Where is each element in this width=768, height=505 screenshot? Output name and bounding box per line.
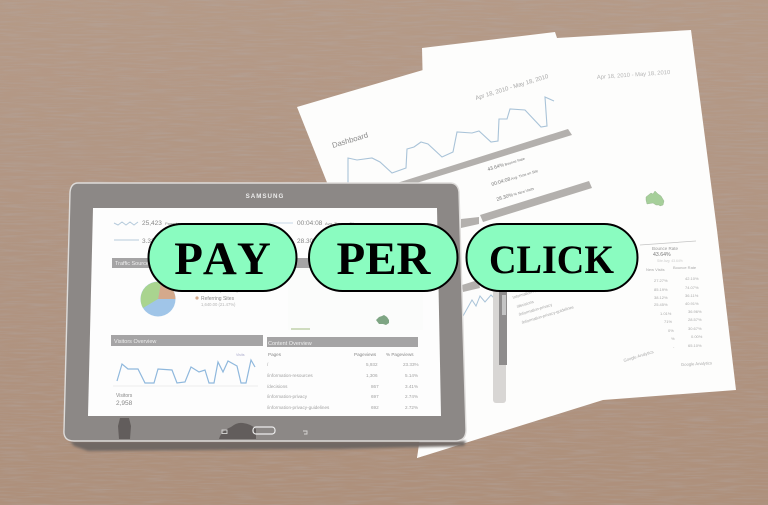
home button [253, 427, 275, 434]
pie chart [140, 282, 176, 316]
heading: Dashboard: Dashboard [331, 130, 369, 150]
panel: content overview: 5,932 [366, 362, 378, 367]
panel: visitors overview: Visitors [116, 393, 133, 399]
line chart [348, 97, 554, 183]
stats: 43.64% Bounce Rate [487, 156, 526, 173]
panel: content overview: /information-privacy-guidelines [267, 405, 330, 410]
button: CLICK: CLICK [489, 237, 614, 282]
back sheet: Site Avg: 43.64% [657, 259, 683, 263]
side table of percentages: 25.45% [654, 302, 668, 307]
button: PAY: PAY [174, 233, 271, 285]
side table of percentages: 28.57% [688, 317, 702, 322]
icon: Australia map [376, 315, 389, 325]
panel: visitors overview: Visits [236, 353, 245, 357]
side table of percentages: 65.10% [688, 343, 702, 348]
screen [88, 208, 441, 416]
stat row: 28.30% [297, 238, 319, 245]
side table of percentages: 27.27% [654, 278, 668, 283]
side table of percentages: 30.67% [688, 326, 702, 331]
back sheet [417, 30, 736, 458]
side table of percentages: 40.91% [685, 301, 699, 306]
side table of percentages: 1.01% [660, 311, 672, 316]
list lines: /information-privacy-guidelines [521, 304, 574, 325]
button: PAY [148, 224, 296, 291]
brand label: SAMSUNG [246, 193, 284, 200]
scene: papers, pen and tablet [64, 30, 736, 458]
back sheet: Apr 18, 2010 - May 18, 2010 [597, 70, 670, 81]
panel: content overview [267, 337, 419, 410]
button: PER [309, 224, 458, 291]
stat row [114, 220, 357, 245]
panel: traffic sources: 2,914.00 (38.34%) [201, 288, 239, 293]
panel: content overview: 2.72% [405, 405, 418, 410]
tablet body [64, 183, 466, 441]
list lines: Information-resources [512, 284, 550, 300]
panel: content overview: 3.41% [405, 384, 418, 389]
side table of percentages: New Visits [646, 267, 665, 272]
button: CLICK [466, 224, 638, 291]
stats: 28.30% % New Visits [496, 186, 535, 203]
back sheet: Google Analytics [681, 360, 712, 367]
list lines [512, 284, 574, 325]
panel: content overview: Pages [268, 352, 282, 357]
panel: content overview: /information-privacy [267, 394, 308, 399]
panel: content overview: Content Overview [268, 341, 312, 347]
button: PER: PER [336, 233, 432, 285]
stat row: 00:04:08 [297, 220, 323, 227]
tablet shadow [70, 441, 466, 451]
tablet [64, 183, 466, 451]
side table of percentages [646, 265, 703, 349]
panel: content overview: Pageviews [354, 352, 377, 357]
list lines: /decisions [516, 299, 534, 309]
back sheet: Google Analytics [623, 349, 654, 363]
side table of percentages: 71% [664, 319, 672, 324]
panel: content overview: / [267, 362, 269, 367]
panel: content overview: 2.74% [405, 394, 418, 399]
papers: analytics printouts [297, 30, 736, 458]
panel: visitors overview: 2,958 [116, 400, 133, 407]
list lines: /information-privacy [518, 302, 553, 317]
side table of percentages: % [671, 336, 675, 341]
side table of percentages: 38.12% [654, 295, 668, 300]
panel: visitors overview [111, 335, 263, 407]
line chart lower [463, 295, 498, 316]
pen [493, 290, 507, 403]
stat row: 3.32 [142, 238, 155, 245]
panel: visitors overview: Visitors Overview [114, 339, 156, 345]
panel: content overview: % Pageviews [386, 352, 414, 357]
hand reflection [118, 418, 256, 439]
side table of percentages: 42.10% [685, 276, 699, 281]
side table of percentages: 85.19% [654, 287, 668, 292]
side table of percentages: Bounce Rate [673, 265, 697, 270]
side table of percentages: 36.96% [688, 309, 702, 314]
panel: content overview: 692 [371, 405, 379, 410]
front sheet: Apr 18, 2010 - May 18, 2010 [475, 74, 550, 102]
panel: traffic sources [112, 258, 264, 316]
panel: content overview: 867 [371, 384, 379, 389]
grey section bar [397, 129, 572, 186]
stat row: 25,423 [142, 220, 162, 227]
stat row: Avg. Time on Site [325, 221, 357, 226]
panel: content overview: 697 [371, 394, 379, 399]
side table of percentages: 74.07% [685, 285, 699, 290]
icon: back and menu keys [222, 430, 307, 434]
side table of percentages: 0.00% [691, 334, 703, 339]
panel: content overview: /decisions [267, 384, 288, 389]
panel: traffic sources: 1,640.00 (21.47%) [201, 302, 236, 307]
panel: content overview: 5.14% [405, 373, 418, 378]
panel: content overview: 1,306 [366, 373, 378, 378]
side table of percentages: 36.11% [685, 293, 699, 298]
back sheet: 43.64% [653, 252, 671, 258]
panel: traffic sources: Referring Sites [201, 296, 235, 302]
grey section bar [480, 181, 592, 222]
panel: map overview [288, 258, 438, 330]
panel: traffic sources: Traffic Sources [115, 261, 152, 267]
panel: content overview: 23.33% [403, 362, 419, 367]
side table of percentages: 0% [668, 328, 674, 333]
back sheet: Bounce Rate [652, 246, 679, 251]
panel: content overview: /information-resources [267, 373, 313, 378]
line chart [117, 360, 255, 383]
icon: map of Australia [646, 191, 664, 206]
side table of percentages: - [673, 344, 675, 349]
stat row: Pageviews [165, 221, 184, 226]
stats [487, 156, 539, 203]
stats: 00:04:08 Avg. Time on Site [491, 168, 539, 188]
table header bar [462, 280, 480, 292]
front sheet [297, 38, 592, 458]
